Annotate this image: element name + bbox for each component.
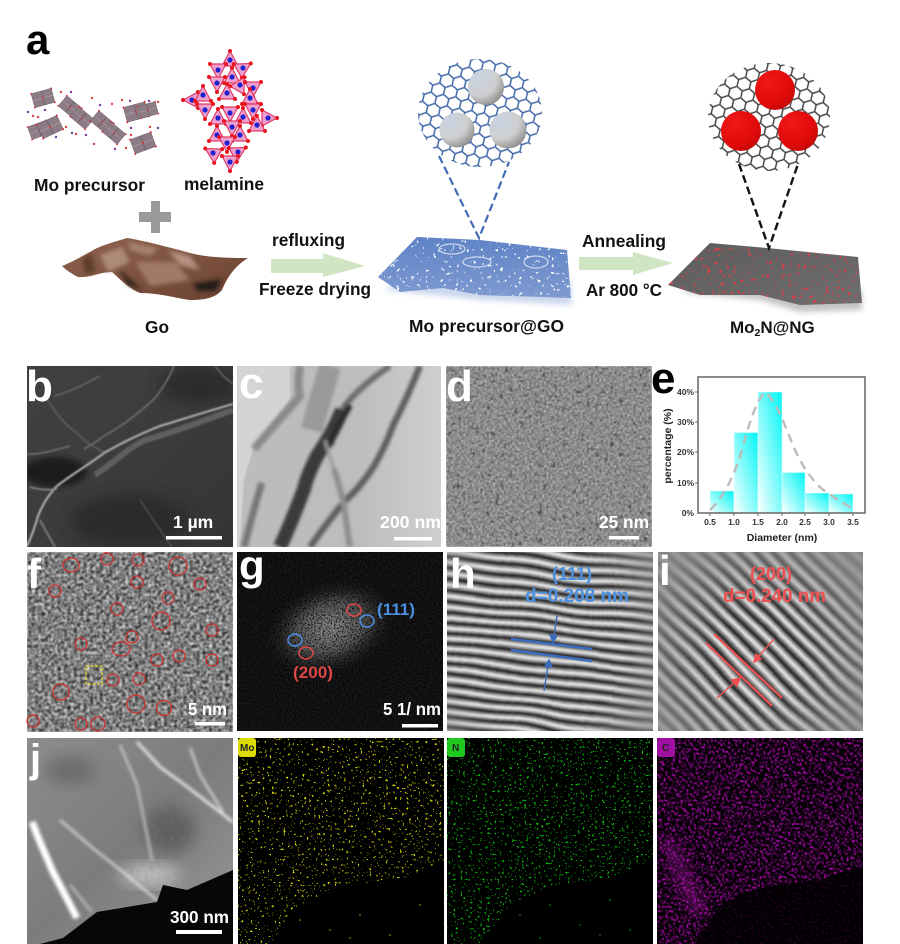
- x axis title: Diameter (nm): [747, 532, 817, 544]
- panel letter j: j: [29, 737, 41, 781]
- dashed zoom lines, blue: [439, 156, 509, 238]
- badge: N: N: [452, 743, 459, 754]
- badge: Mo: Mo: [240, 743, 254, 754]
- panel: f, HRTEM with circled particles: [27, 550, 233, 732]
- badge: C: C: [662, 743, 669, 754]
- fringe measurement lines: [706, 634, 782, 706]
- scale bar: 300 nm: [170, 911, 228, 934]
- panel letter a: a: [26, 16, 50, 63]
- label: d=0.208 nm: d=0.208 nm: [525, 586, 629, 607]
- scale bar: 5 1/nm: [384, 702, 440, 728]
- icon: plus sign: [139, 201, 171, 233]
- panel letter h: h: [450, 550, 476, 597]
- label: Freeze drying: Freeze drying: [259, 279, 371, 299]
- fringe measurement lines: [511, 639, 592, 661]
- x axis tick labels: [704, 517, 859, 527]
- scale bar: 1 µm: 1 µm: [173, 512, 213, 532]
- arrow: refluxing step: [271, 253, 365, 277]
- label: refluxing: refluxing: [272, 230, 345, 250]
- y axis tick labels: 0%: [682, 508, 694, 518]
- panel: j, HAADF-STEM image: [27, 737, 233, 944]
- y axis title: percentage (%): [662, 408, 674, 484]
- dashed zoom lines, black: [739, 164, 798, 248]
- label: Mo precursor@GO: Mo precursor@GO: [409, 316, 564, 336]
- arrows: red: [717, 639, 774, 698]
- label: Mo2N@NG: 2: [755, 327, 761, 339]
- diffraction spot rings: [288, 604, 374, 659]
- x axis tick labels: 1.0: [728, 517, 740, 527]
- arrows: blue: [544, 616, 557, 691]
- panel: e, diameter histogram: [651, 354, 865, 544]
- x axis tick labels: 3.5: [847, 517, 859, 527]
- panel letter f: f: [27, 550, 42, 597]
- panel letter c: c: [239, 359, 263, 408]
- dashed distribution curve: [710, 392, 853, 510]
- panel letter d: d: [446, 362, 473, 411]
- label: Mo2N@NG: N@NG: [760, 318, 815, 337]
- panel: Mo elemental map: [238, 738, 444, 944]
- x axis tick labels: 3.0: [823, 517, 835, 527]
- scale bar: 200 nm: 200 nm: [380, 512, 441, 532]
- panel: g, FFT pattern: [237, 542, 443, 731]
- scale bar: 5 nm: 5 nm: [188, 699, 227, 719]
- scale bar: 200 nm: [380, 516, 440, 540]
- y axis tick labels: 40%: [677, 387, 694, 397]
- y axis tick labels: 10%: [677, 478, 694, 488]
- chart frame and ticks: [695, 377, 865, 516]
- selected area box: [86, 666, 102, 684]
- scale bar: 1 µm: [166, 516, 222, 540]
- label: (200): (200): [750, 564, 792, 584]
- panel: b, SEM image: [23, 362, 240, 547]
- y axis tick labels: 20%: [677, 447, 694, 457]
- y axis tick labels: [677, 387, 694, 518]
- panel: a, synthesis scheme: [26, 16, 865, 339]
- scale bar: 300 nm: 300 nm: [170, 907, 229, 927]
- arrow: annealing step: [579, 252, 673, 275]
- icon: melamine framework: [181, 49, 279, 173]
- label: melamine: melamine: [184, 174, 264, 194]
- x axis tick labels: 1.5: [752, 517, 764, 527]
- icon: Mo precursor crystals: [26, 87, 159, 155]
- panel: N elemental map: [447, 738, 653, 944]
- particle circles: [27, 553, 218, 731]
- label: (111): (111): [552, 564, 592, 584]
- icon: Mo precursor on GO sheet: [375, 235, 575, 305]
- panel: c, TEM image: [237, 359, 441, 547]
- icon: graphene oxide sheet: [62, 238, 248, 300]
- x axis tick labels: 0.5: [704, 517, 716, 527]
- x axis tick labels: 2.0: [776, 517, 788, 527]
- panel letter i: i: [659, 547, 671, 594]
- histogram bars: [710, 392, 853, 513]
- dark vacuum region: [40, 870, 233, 944]
- panel letter g: g: [239, 542, 265, 589]
- label: Ar 800 °C: Ar 800 °C: [586, 280, 662, 300]
- label: Go: Go: [145, 317, 169, 337]
- panel: i, lattice fringes (200): [658, 552, 863, 731]
- x axis tick labels: 2.5: [799, 517, 811, 527]
- bare support film corner: [237, 366, 290, 547]
- label: (200): (200): [293, 664, 333, 682]
- y axis tick labels: 30%: [677, 417, 694, 427]
- label: (111): (111): [377, 601, 415, 619]
- label: Annealing: Annealing: [582, 231, 666, 251]
- scale bar: 25 nm: 25 nm: [599, 512, 649, 532]
- panel: C elemental map: [657, 738, 863, 944]
- panel letter b: b: [26, 362, 53, 411]
- badge: Mo: [238, 738, 256, 757]
- icon: Mo2N on N-doped graphene sheet: [665, 240, 865, 312]
- badge: C: [657, 738, 675, 757]
- badge: N: [447, 738, 465, 757]
- panel: d, TEM particles: [446, 362, 652, 547]
- scale bar: 5 1/nm: 5 1/ nm: [383, 699, 441, 719]
- icon: zoom circle, graphene with grey particles: [418, 59, 542, 167]
- icon: zoom circle, graphene with red particles: [708, 63, 830, 171]
- label: d=0.240 nm: d=0.240 nm: [723, 586, 826, 607]
- label: Mo precursor: Mo precursor: [34, 175, 145, 195]
- panel letter e: e: [651, 354, 675, 403]
- label: Mo2N@NG: Mo: [730, 318, 755, 337]
- panel: h, lattice fringes (111): [447, 552, 653, 731]
